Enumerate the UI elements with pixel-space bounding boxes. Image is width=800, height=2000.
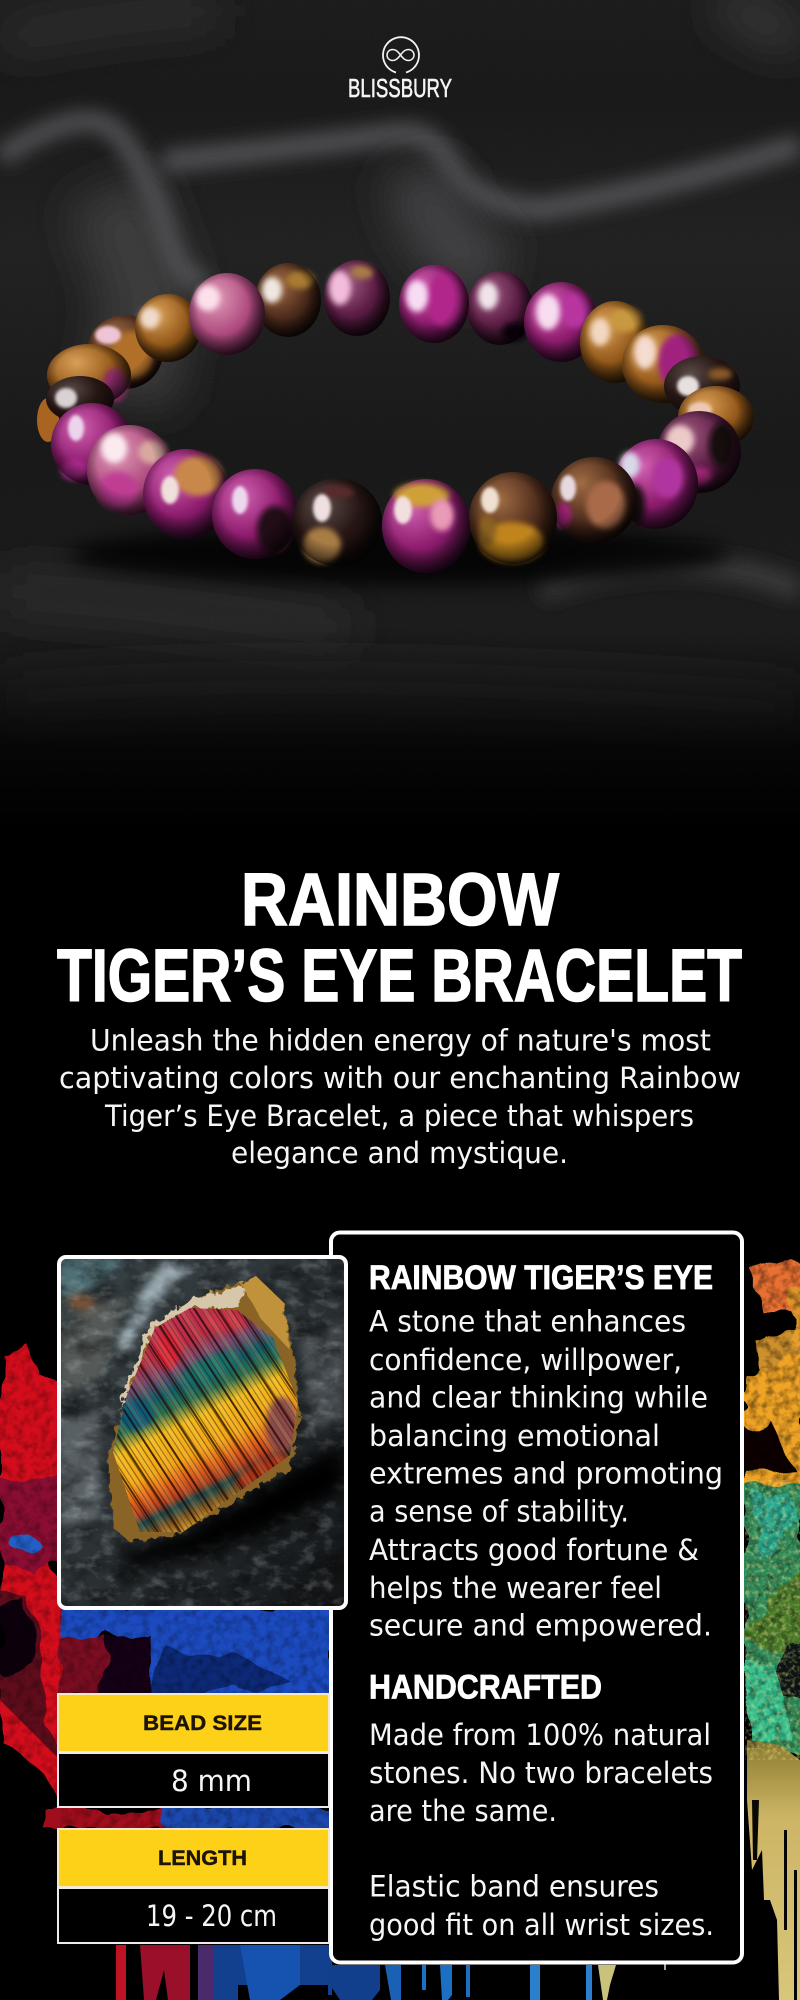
text: handcrafted description: Elastic band ensures — [369, 1870, 659, 1904]
title — [57, 858, 742, 1017]
panel: description — [331, 1232, 742, 1962]
text: handcrafted description: are the same. — [369, 1794, 557, 1828]
rock background — [60, 1258, 345, 1607]
back beads — [87, 260, 754, 448]
front beads — [37, 344, 741, 573]
value — [58, 1888, 329, 1943]
text: stone description: A stone that enhances — [369, 1304, 686, 1338]
hero photo: fabric with bracelet — [0, 0, 800, 830]
text: stone description: extremes and promoting — [369, 1456, 723, 1490]
intro paragraph: captivating colors with our enchanting Rainbow — [59, 1061, 741, 1095]
spec table: length: LENGTH — [158, 1847, 247, 1870]
teal paint — [745, 1480, 800, 1760]
orange paint — [745, 1258, 800, 1490]
intro paragraph — [59, 1024, 741, 1170]
text: stone description — [369, 1304, 723, 1642]
pale gold drips — [747, 1740, 800, 2000]
fabric backdrop — [0, 0, 800, 830]
intro paragraph: Unleash the hidden energy of nature's most — [90, 1024, 711, 1058]
heading: rainbow tiger's eye: RAINBOW TIGER’S EYE — [369, 1259, 713, 1297]
label — [58, 1829, 329, 1887]
text: stone description: a sense of stability. — [369, 1494, 629, 1528]
text: stone description: confidence, willpower, — [369, 1343, 682, 1377]
text: stone description: and clear thinking while — [369, 1380, 708, 1414]
intro paragraph: elegance and mystique. — [231, 1136, 568, 1170]
brand name: BLISSBURY — [348, 73, 452, 103]
spec table: bead size — [58, 1694, 329, 1807]
spec table: bead size: BEAD SIZE — [143, 1712, 262, 1735]
text: handcrafted description: good fit on all wrist sizes. — [369, 1908, 714, 1942]
text: handcrafted description: Made from 100% natural — [369, 1718, 711, 1752]
text: stone description: helps the wearer feel — [369, 1571, 662, 1605]
text: stone description: Attracts good fortune & — [369, 1533, 699, 1567]
polished face — [113, 1308, 298, 1532]
heading: handcrafted: HANDCRAFTED — [369, 1668, 602, 1706]
text: handcrafted description — [369, 1718, 714, 1942]
bracelet shadow — [70, 525, 730, 585]
spec table: bead size: 8 mm — [171, 1764, 252, 1798]
stone body — [108, 1277, 300, 1542]
paint drips: bottom — [116, 1945, 666, 2000]
logo: Blissbury — [348, 37, 452, 103]
paint splatter: left red — [0, 1345, 170, 1830]
intro paragraph: Tiger’s Eye Bracelet, a piece that whispers — [104, 1099, 694, 1133]
spec table: length — [58, 1829, 329, 1943]
text: handcrafted description: stones. No two bracelets — [369, 1756, 713, 1790]
paint splatter: center blue — [60, 1605, 335, 1835]
photo fade to black — [0, 630, 800, 830]
title: RAINBOW — [241, 858, 559, 941]
spec table: length: 19 - 20 cm — [146, 1899, 277, 1933]
icon: infinity in circle — [383, 37, 419, 72]
value — [58, 1753, 329, 1807]
image: raw rainbow tiger's eye stone — [59, 1257, 346, 1608]
text: stone description: secure and empowered. — [369, 1608, 712, 1642]
text: stone description: balancing emotional — [369, 1419, 660, 1453]
bracelet — [37, 260, 754, 573]
paint splatter: right side — [745, 1258, 800, 2000]
label — [58, 1694, 329, 1752]
